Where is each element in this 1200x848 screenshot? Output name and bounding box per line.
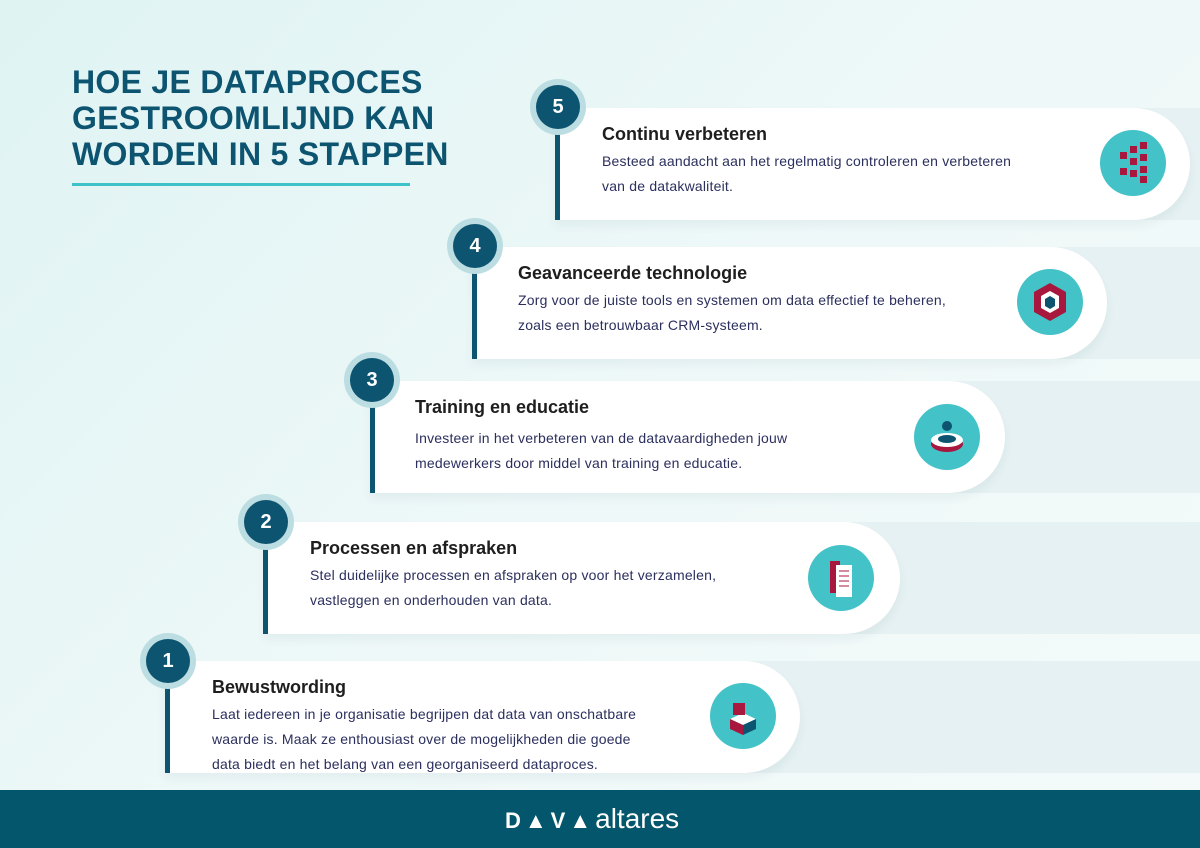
title: HOE JE DATAPROCES — [72, 64, 423, 100]
icon 3 — [914, 404, 980, 470]
icon 1 — [710, 683, 776, 749]
number 4 — [447, 218, 503, 274]
text 1: Laat iedereen in je organisatie begrijpen dat data van onschatbare waarde is. Maak ze enthousiast over de mogelijkheden die goede data biedt en het belang van een georganiseerd dataproces. — [212, 706, 636, 772]
step 1 — [165, 661, 1200, 776]
heading 4: Geavanceerde technologie — [518, 263, 747, 283]
step 2 — [263, 522, 1200, 638]
icon 5 — [1100, 130, 1166, 196]
number 3 — [344, 352, 400, 408]
step 3 — [370, 381, 1200, 496]
footer — [0, 790, 1200, 848]
logo: D▲V▲altares — [505, 803, 679, 834]
title: GESTROOMLIJND KAN — [72, 100, 434, 136]
number 3: 3 — [366, 369, 378, 391]
number 1: 1 — [162, 650, 174, 672]
icon 4 — [1017, 269, 1083, 335]
text 4: Zorg voor de juiste tools en systemen om data effectief te beheren, zoals een betrouwbaar CRM-systeem. — [518, 292, 946, 333]
title — [72, 64, 449, 172]
text 2: Stel duidelijke processen en afspraken op voor het verzamelen, vastleggen en onderhouden van data. — [310, 567, 716, 608]
text 5: Besteed aandacht aan het regelmatig controleren en verbeteren van de datakwaliteit. — [602, 153, 1011, 194]
step 4 — [472, 247, 1200, 362]
heading 5: Continu verbeteren — [602, 124, 767, 144]
number 4: 4 — [469, 235, 481, 257]
number 2 — [238, 494, 294, 550]
icon 2 — [808, 545, 874, 611]
heading 1: Bewustwording — [212, 677, 346, 697]
heading 3: Training en educatie — [415, 397, 589, 417]
number 2: 2 — [260, 511, 272, 533]
text 3: Investeer in het verbeteren van de datavaardigheden jouw medewerkers door middel van training en educatie. — [415, 430, 787, 471]
number 5: 5 — [552, 96, 564, 118]
title: WORDEN IN 5 STAPPEN — [72, 136, 449, 172]
number 5 — [530, 79, 586, 135]
step 5 — [555, 108, 1200, 224]
heading 2: Processen en afspraken — [310, 538, 517, 558]
number 1 — [140, 633, 196, 689]
